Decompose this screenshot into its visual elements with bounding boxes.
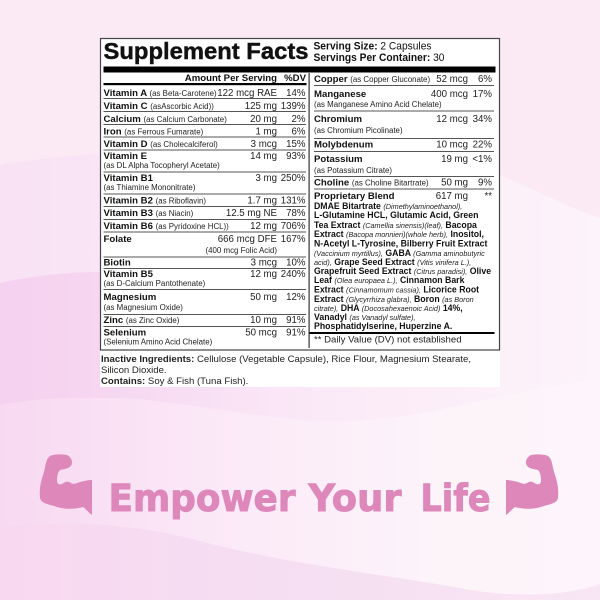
left nutrient table: 3 mcg [251, 139, 277, 150]
left nutrient table: 93% [286, 151, 306, 162]
column divider [308, 73, 310, 348]
left nutrient table: Zinc (as Zinc Oxide) [104, 315, 180, 326]
inactive ingredients: Contains: Soy & Fish (Tuna Fish). [101, 376, 248, 387]
left nutrient table: 2% [291, 114, 306, 125]
title: Supplement Facts [104, 38, 308, 64]
left nutrient table: Vitamin B2 (as Riboflavin) [104, 196, 206, 206]
left nutrient table: (as Magnesium Oxide) [104, 303, 183, 312]
right nutrient table: 12 mcg [436, 114, 468, 125]
proprietary blend: Extract (Glycyrrhiza glabra), Boron (as Boron [314, 294, 474, 304]
right nutrient table: (as Manganese Amino Acid Chelate) [314, 100, 442, 109]
left nutrient table: Vitamin A (as Beta-Carotene) [104, 88, 217, 99]
proprietary blend: (Vaccinium myrtillus), GABA (Gamma aminobutyric [314, 248, 485, 258]
proprietary blend [314, 191, 492, 331]
proprietary blend: Leaf (Olea europaea L.), Cinnamon Bark [314, 275, 464, 285]
serving info [314, 40, 444, 64]
left nutrient table [104, 88, 306, 346]
left column header: Amount Per Serving [185, 73, 277, 84]
proprietary blend: Extract (Bacopa monnieri)(whole herb), Inositol, [314, 229, 484, 239]
proprietary blend: L-Glutamine HCL, Glutamic Acid, Green [314, 210, 478, 220]
left nutrient table: 10 mg [250, 315, 277, 326]
left nutrient table: 706% [281, 221, 306, 232]
left nutrient table: 14 mg [250, 151, 277, 162]
right nutrient table: 17% [473, 89, 492, 100]
proprietary blend: Vanadyl (as Vanadyl sulfate), [314, 312, 416, 322]
icon: right flexed arm [506, 454, 558, 515]
left nutrient table: 3 mg [255, 173, 277, 184]
right nutrient table: (as Chromium Picolinate) [314, 126, 403, 135]
left column header [104, 73, 307, 85]
inactive ingredients [101, 354, 471, 387]
left nutrient table: 78% [286, 208, 306, 219]
left nutrient table: (as DL Alpha Tocopheryl Acetate) [104, 161, 220, 170]
left nutrient table: Vitamin D (as Cholecalciferol) [104, 139, 218, 150]
left nutrient table: Vitamin E [104, 151, 148, 162]
top thick bar [104, 66, 496, 72]
serving info: Servings Per Container: 30 [314, 52, 444, 64]
left nutrient table: (as Thiamine Mononitrate) [104, 183, 196, 192]
proprietary blend: citrate), DHA (Docosahexaenoic Acid) 14%, [314, 303, 463, 313]
proprietary blend: Proprietary Blend [314, 191, 395, 202]
left nutrient table: Vitamin C (asAscorbic Acid)) [104, 101, 214, 112]
right nutrient table: Copper (as Copper Gluconate) [314, 74, 430, 85]
left nutrient table: Selenium [104, 328, 146, 338]
left nutrient table: 3 mcg [251, 258, 277, 268]
daily value note: ** Daily Value (DV) not established [314, 334, 462, 346]
left nutrient table: (400 mcg Folic Acid) [206, 246, 277, 255]
left column header: %DV [284, 73, 307, 84]
proprietary blend: Grapefruit Seed Extract (Citrus paradisi), Olive [314, 266, 491, 276]
inactive ingredients: Inactive Ingredients: Cellulose (Vegetable Capsule), Rice Flour, Magnesium Stearate, [101, 354, 471, 365]
left nutrient table: (as D-Calcium Pantothenate) [104, 279, 206, 288]
left nutrient table: Iron (as Ferrous Fumarate) [104, 126, 204, 138]
right nutrient table: 50 mg [441, 178, 468, 188]
right nutrient table: Choline (as Choline Bitartrate) [314, 178, 429, 188]
right nutrient table: (as Potassium Citrate) [314, 166, 392, 175]
left nutrient table: 250% [281, 173, 306, 184]
right nutrient table: 6% [478, 74, 492, 85]
left nutrient table: 1.7 mg [247, 196, 277, 206]
left nutrient table: 1 mg [255, 126, 277, 138]
right nutrient table: Molybdenum [314, 140, 373, 150]
slogan: Your [308, 477, 402, 520]
right nutrient table: 9% [478, 178, 492, 188]
proprietary blend: ** [484, 191, 492, 202]
proprietary blend: DMAE Bitartrate (Dimethylaminoethanol), [314, 201, 462, 211]
left nutrient table: 6% [291, 126, 306, 138]
slogan: Life [420, 477, 490, 520]
right nutrient table: <1% [472, 154, 492, 165]
left nutrient table: 12 mg [250, 269, 277, 280]
left nutrient table: (Selenium Amino Acid Chelate) [104, 338, 213, 346]
icon: left flexed arm [40, 454, 92, 515]
left nutrient table: 50 mcg [245, 328, 277, 338]
left nutrient table: 10% [286, 258, 306, 268]
right nutrient table [314, 74, 494, 189]
left nutrient table: 167% [281, 234, 306, 245]
proprietary blend: acid), Grape Seed Extract (Vitis vinifera L.), [314, 257, 471, 267]
serving info: Serving Size: 2 Capsules [314, 40, 432, 52]
proprietary blend: Tea Extract (Camellia sinensis)(leaf), Bacopa [314, 220, 478, 230]
slogan [108, 477, 490, 520]
right nutrient table: Chromium [314, 114, 362, 125]
right nutrient table: 34% [473, 114, 492, 125]
left nutrient table: 666 mcg DFE [218, 234, 278, 245]
slogan: Empower [108, 477, 296, 520]
left nutrient table: Vitamin B5 [104, 269, 154, 280]
left nutrient table: 12 mg [250, 221, 277, 232]
left nutrient table: Calcium (as Calcium Carbonate) [104, 114, 227, 125]
left nutrient table: 240% [281, 269, 306, 280]
left nutrient table: 15% [286, 139, 306, 150]
right nutrient table: 22% [473, 140, 492, 150]
right nutrient table: 52 mcg [436, 74, 468, 85]
left nutrient table: 20 mg [250, 114, 277, 125]
left nutrient table: 139% [281, 101, 306, 112]
left nutrient table: 131% [281, 196, 306, 206]
left nutrient table: 125 mg [245, 101, 277, 112]
left nutrient table: 91% [286, 328, 306, 338]
proprietary blend: Extract (Cinnamomum cassia), Licorice Root [314, 284, 479, 295]
left nutrient table: Vitamin B1 [104, 173, 154, 184]
inactive ingredients: Silicon Dioxide. [101, 365, 167, 376]
left nutrient table: 12.5 mg NE [226, 208, 278, 219]
left nutrient table: 12% [286, 292, 306, 303]
left nutrient table: Magnesium [104, 292, 156, 303]
right nutrient table: Potassium [314, 154, 363, 165]
left nutrient table: Biotin [104, 258, 131, 268]
left nutrient table: 50 mg [250, 292, 277, 303]
proprietary blend: N-Acetyl L-Tyrosine, Bilberry Fruit Extract [314, 238, 487, 249]
left nutrient table: Vitamin B3 (as Niacin) [104, 208, 194, 219]
proprietary blend: Phosphatidylserine, Huperzine A. [314, 321, 452, 331]
right nutrient table: 400 mcg [431, 89, 468, 100]
supplement facts panel [100, 38, 500, 387]
left nutrient table: Folate [104, 234, 132, 245]
daily value rule [310, 332, 494, 334]
left nutrient table: 122 mcg RAE [217, 88, 278, 99]
proprietary blend: 617 mg [436, 191, 468, 202]
right nutrient table: Manganese [314, 89, 366, 100]
left nutrient table: 14% [286, 88, 306, 99]
right nutrient table: 10 mcg [436, 140, 468, 150]
right nutrient table: 19 mg [441, 154, 468, 165]
left nutrient table: 91% [286, 315, 306, 326]
left nutrient table: Vitamin B6 (as Pyridoxine HCL)) [104, 221, 229, 232]
